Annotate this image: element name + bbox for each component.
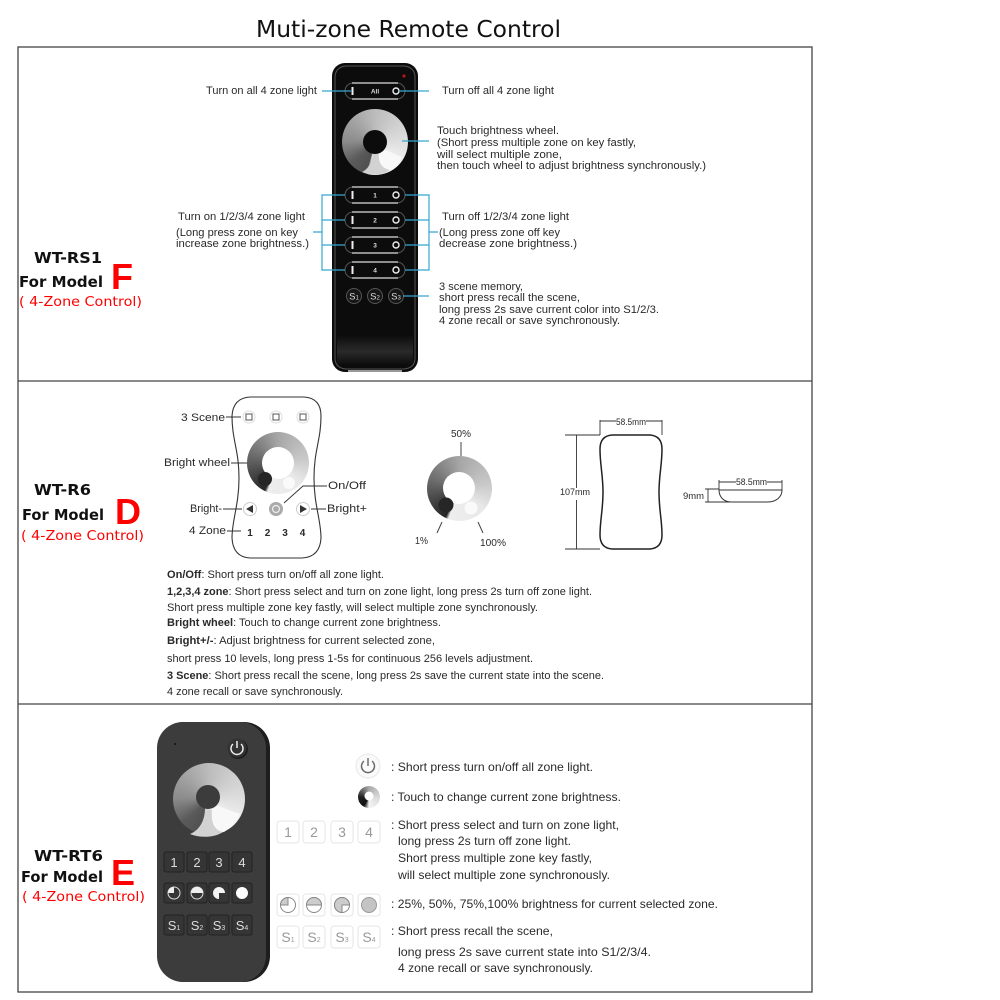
brightness wheel <box>247 432 309 494</box>
scene keys: S2 <box>370 292 380 302</box>
brightness scale wheel <box>415 429 506 549</box>
zone keys: 4 <box>238 855 246 870</box>
labels: remote WT-R6: On/Off <box>328 480 367 492</box>
text: zone off <box>439 211 577 250</box>
dimension drawing: side <box>683 477 782 502</box>
instructions: WT-RT6: : Touch to change current zone brightness. <box>391 790 621 804</box>
power button <box>228 738 248 759</box>
icon: wheel <box>358 786 380 808</box>
key row: all: All <box>371 88 379 96</box>
dimension drawing: side: 58.5mm <box>736 477 767 488</box>
key row: zone 1: 1 <box>373 192 377 200</box>
icons: zone keys <box>277 821 380 843</box>
scene keys: S3 <box>391 292 402 302</box>
zone keys: 3 <box>215 855 223 870</box>
model label: WT-R6: WT-R6 <box>34 481 91 499</box>
icon: power <box>356 754 380 778</box>
text: zone off: decrease zone brightness.) <box>439 238 577 250</box>
text: brightness wheel <box>436 125 706 172</box>
instructions: WT-RT6: 4 zone recall or save synchronously. <box>398 961 593 975</box>
instructions: WT-RT6: : 25%, 50%, 75%,100% brightness for current selected zone. <box>391 897 718 911</box>
remote outline: WT-R6 <box>232 397 321 558</box>
text: zone on <box>176 211 309 250</box>
panel: WT-R6 model D <box>21 397 782 698</box>
panel: WT-RT6 model E <box>21 722 718 982</box>
instructions: WT-RT6: : Short press turn on/off all zone light. <box>391 760 593 774</box>
scene keys <box>164 915 252 935</box>
icons: zone keys: 4 <box>365 824 373 840</box>
model label: WT-R6: ( 4-Zone Control) <box>21 529 144 544</box>
text: brightness wheel: then touch wheel to adjust brightness synchronously.) <box>437 160 706 172</box>
zone numbers: 1 <box>247 528 253 539</box>
labels: remote WT-R6: 4 Zone <box>189 525 226 537</box>
model label: WT-RS1: F <box>111 256 133 297</box>
labels: remote WT-R6: 3 Scene <box>181 412 225 424</box>
icons: zone keys: 3 <box>338 824 346 840</box>
icons: scene keys: S3 <box>335 929 349 945</box>
remote: WT-RT6 <box>157 722 270 982</box>
dimension drawing: front: 107mm <box>560 487 590 498</box>
labels: remote WT-R6: Bright- <box>190 503 222 515</box>
key row: zone 4: 4 <box>373 268 377 274</box>
key row: zone 3 <box>345 237 405 253</box>
scene keys: S1 <box>168 918 180 933</box>
model label: WT-RT6: ( 4-Zone Control) <box>22 890 145 905</box>
key row: zone 1 <box>345 187 405 203</box>
scene keys: S4 <box>236 918 248 933</box>
brightness scale wheel: 100% <box>480 538 506 549</box>
text: scene memory: long press 2s save current color into S1/2/3. <box>439 304 659 316</box>
callout lines <box>313 91 438 296</box>
instructions: WT-R6: 1,2,3,4 zone: Short press select and turn on zone light, long press 2s turn off zone light. <box>167 586 592 598</box>
instructions: WT-RT6: long press 2s turn off zone light. <box>398 834 571 848</box>
dimension drawing: side: 9mm <box>683 491 704 502</box>
text: zone on: Turn on 1/2/3/4 zone light <box>178 211 305 223</box>
zone numbers: 3 <box>282 528 288 539</box>
zone numbers: 2 <box>265 528 271 539</box>
instructions: WT-RT6: will select multiple zone synchronously. <box>397 868 610 882</box>
text: brightness wheel: will select multiple zone, <box>436 149 562 161</box>
brightness wheel <box>342 109 408 175</box>
instructions: WT-RT6: long press 2s save current state into S1/2/3/4. <box>398 945 651 959</box>
text: scene memory: 3 scene memory, <box>439 281 523 293</box>
instructions: WT-R6: 3 Scene: Short press recall the scene, long press 2s save the current state into the scene. <box>167 670 604 682</box>
zone keys <box>164 852 252 872</box>
text: zone on: (Long press zone on key <box>176 227 299 239</box>
instructions: WT-RT6 <box>391 760 718 975</box>
instructions: WT-RT6: Short press multiple zone key fastly, <box>398 851 592 865</box>
instructions: WT-R6: On/Off: Short press turn on/off all zone light. <box>167 569 384 581</box>
model label: WT-RT6 <box>21 847 145 905</box>
brightness scale wheel: 50% <box>451 429 471 440</box>
zone numbers <box>247 528 306 539</box>
key row: zone 3: 3 <box>373 242 377 250</box>
instructions: WT-R6: 4 zone recall or save synchronously. <box>167 686 343 698</box>
labels: remote WT-R6: Bright+ <box>327 503 367 515</box>
model label: WT-R6 <box>21 481 144 544</box>
remote: WT-RS1 <box>332 63 418 372</box>
model label: WT-RS1 <box>19 249 142 310</box>
model label: WT-R6: For Model <box>22 506 104 524</box>
icons: brightness keys <box>277 894 380 916</box>
model label: WT-RS1: ( 4-Zone Control) <box>19 295 142 310</box>
instructions: WT-R6: short press 10 levels, long press 1-5s for continuous 256 levels adjustment. <box>167 653 533 665</box>
key row: zone 2 <box>345 212 405 228</box>
text: zone off: Turn off 1/2/3/4 zone light <box>442 211 569 223</box>
brightness scale wheel: 1% <box>415 536 428 547</box>
brightness keys <box>164 883 252 903</box>
text: brightness wheel: Touch brightness wheel. <box>437 125 559 137</box>
scene icons <box>243 411 309 423</box>
icons: scene keys: S2 <box>307 929 321 945</box>
instructions: WT-RT6: : Short press recall the scene, <box>391 924 553 938</box>
text: zone off: (Long press zone off key <box>439 227 560 239</box>
outer frame with panel dividers <box>18 47 812 992</box>
icons: scene keys: S1 <box>281 929 295 945</box>
key row: zone 2: 2 <box>373 218 377 224</box>
instructions: WT-R6 <box>167 569 604 698</box>
instructions: WT-R6: Bright wheel: Touch to change current zone brightness. <box>167 617 441 629</box>
text: scene memory: 4 zone recall or save synchronously. <box>439 315 620 327</box>
key row: zone 4 <box>345 262 405 278</box>
instructions: WT-R6: Short press multiple zone key fastly, will select multiple zone synchronously. <box>167 602 538 614</box>
text: brightness wheel: (Short press multiple zone on key fastly, <box>437 137 636 149</box>
model label: WT-RT6: WT-RT6 <box>34 847 103 865</box>
panel: WT-RS1 model F <box>19 63 706 372</box>
text: zone on: increase zone brightness.) <box>176 238 309 250</box>
labels: remote WT-R6: Bright wheel <box>164 457 230 469</box>
text: scene memory <box>439 281 659 327</box>
dimension drawing: front <box>560 417 662 549</box>
icons: scene keys <box>277 926 380 948</box>
icons: zone keys: 1 <box>284 824 292 840</box>
model label: WT-RS1: WT-RS1 <box>34 249 102 267</box>
labels: remote WT-R6 <box>164 412 367 537</box>
scene keys <box>346 288 404 304</box>
model label: WT-RT6: For Model <box>21 868 103 886</box>
key row: all <box>345 83 405 99</box>
title: Muti-zone Remote Control <box>256 17 561 43</box>
text: scene memory: short press recall the scene, <box>439 292 580 304</box>
text: turn off all: Turn off all 4 zone light <box>442 85 554 97</box>
zone keys: 1 <box>170 855 178 870</box>
scene keys: S3 <box>213 918 225 933</box>
model label: WT-RS1: For Model <box>19 273 103 291</box>
zone keys: 2 <box>193 855 201 870</box>
scene keys: S2 <box>191 918 203 933</box>
scene keys: S1 <box>349 292 360 302</box>
text: turn on all: Turn on all 4 zone light <box>206 85 317 97</box>
instructions: WT-RT6: : Short press select and turn on zone light, <box>391 818 619 832</box>
model label: WT-R6: D <box>115 491 141 532</box>
model label: WT-RT6: E <box>111 852 135 893</box>
icons: scene keys: S4 <box>362 929 376 945</box>
icons: zone keys: 2 <box>310 824 318 840</box>
dimension drawing: front: 58.5mm <box>616 417 646 428</box>
instructions: WT-R6: Bright+/-: Adjust brightness for current selected zone, <box>167 635 435 647</box>
bright minus, power, bright plus <box>244 502 310 516</box>
label leader lines <box>223 417 327 531</box>
brightness wheel <box>173 763 245 837</box>
zone numbers: 4 <box>300 528 306 539</box>
